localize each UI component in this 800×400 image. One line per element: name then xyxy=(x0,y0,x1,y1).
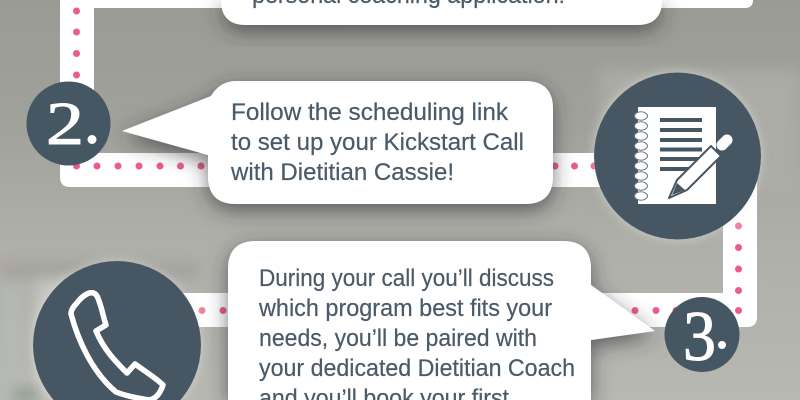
number badge 2 xyxy=(26,82,110,166)
dotted white path: lower route xyxy=(150,180,757,327)
step 3 text xyxy=(258,265,575,400)
pencil xyxy=(669,140,727,198)
icon: telephone handset xyxy=(33,261,201,400)
step 3 text: your dedicated Dietitian Coach xyxy=(259,355,575,382)
step 2 text xyxy=(230,99,524,186)
step 3 text: which program best fits your xyxy=(258,295,552,322)
step 3 text: needs, you’ll be paired with xyxy=(259,325,537,352)
dotted white path: upper route xyxy=(60,0,753,187)
icon: notepad and pencil xyxy=(594,72,761,240)
step 2 text: to set up your Kickstart Call xyxy=(231,129,524,156)
number badge 3: 3 xyxy=(683,298,716,376)
notepad spiral xyxy=(634,112,648,200)
step 2 text: Follow the scheduling link xyxy=(231,99,509,126)
notepad lines xyxy=(660,118,702,171)
speech bubble: step 3 xyxy=(228,241,655,400)
number badge 3 xyxy=(664,297,740,376)
step 3 text: During your call you’ll discuss xyxy=(259,265,554,292)
number badge 2: 2 xyxy=(46,91,84,158)
step 2 text: with Dietitian Cassie! xyxy=(230,159,454,186)
speech bubble: step 2 xyxy=(122,81,553,204)
speech bubble: step 1 xyxy=(221,0,662,25)
